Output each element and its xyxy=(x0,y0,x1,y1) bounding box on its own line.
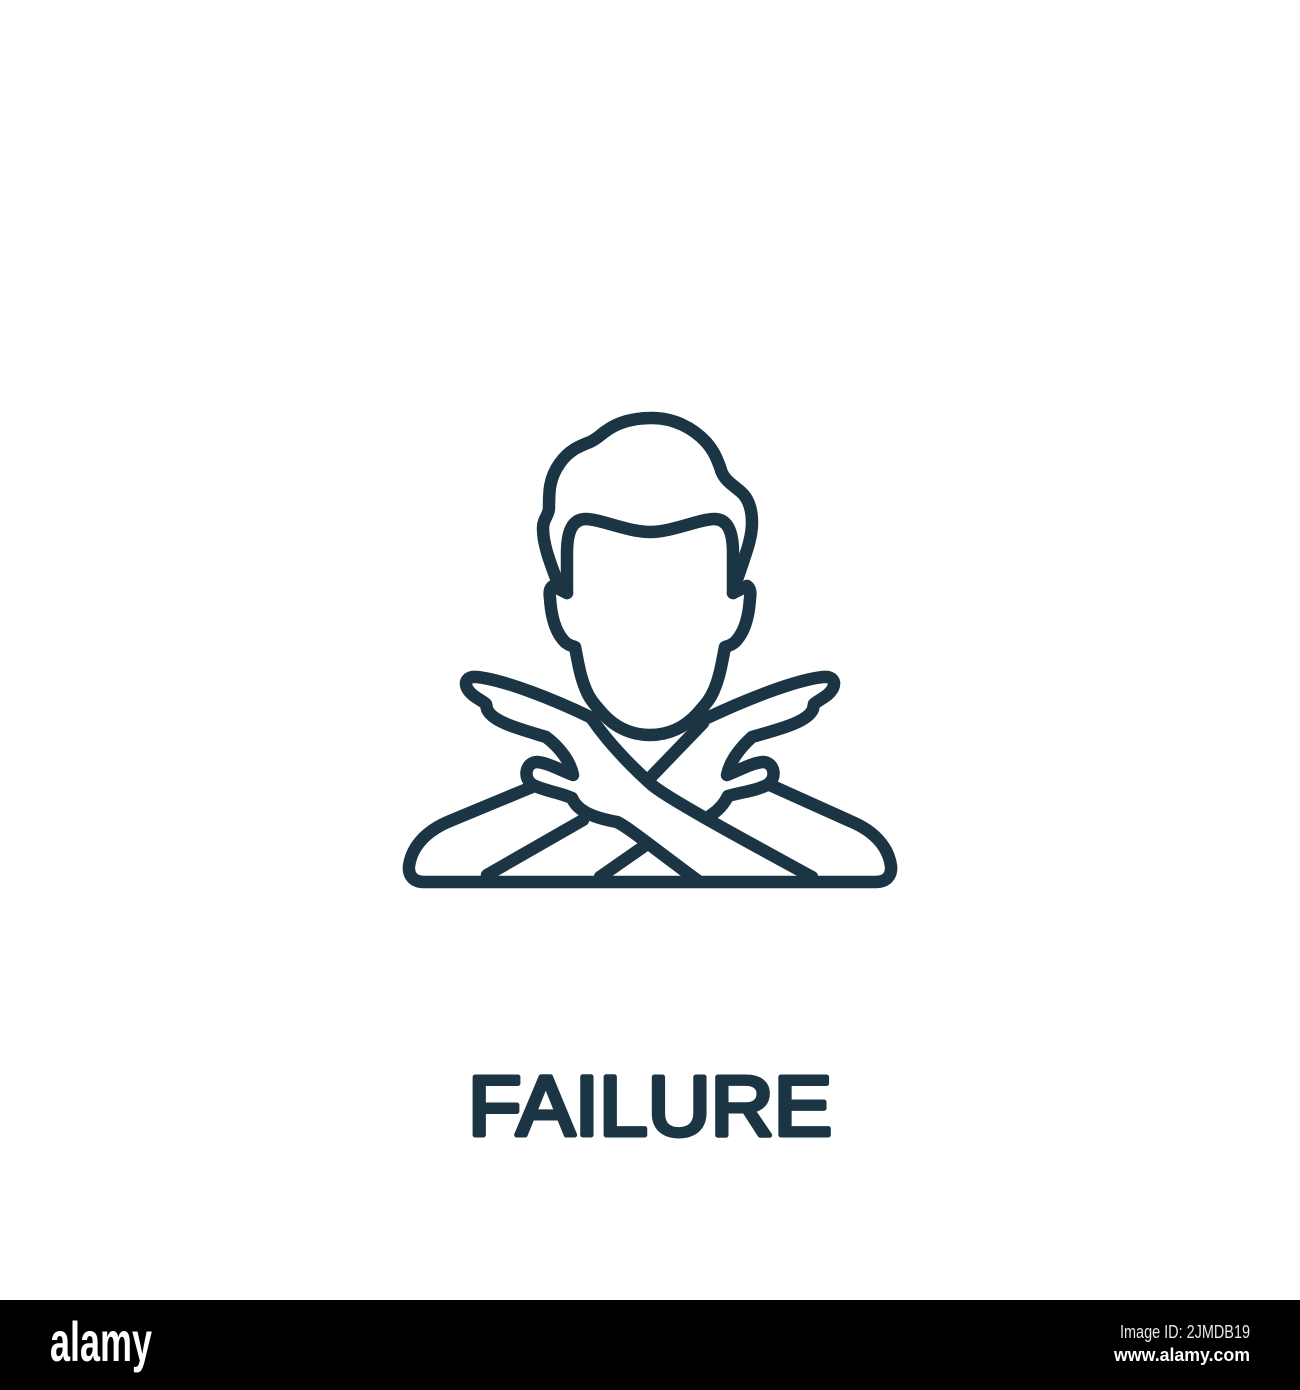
right hand xyxy=(707,677,834,815)
hairline and forehead xyxy=(567,519,733,593)
footer website: www.alamy.com xyxy=(1113,1345,1250,1365)
inner arm edge xyxy=(650,723,703,778)
footer logo: alamy: alamy xyxy=(50,1310,152,1373)
lower centre edge xyxy=(600,847,643,877)
lower left arm edge xyxy=(487,820,583,875)
footer image id: Image ID: 2JMDB19 xyxy=(1120,1322,1250,1342)
title: FAILURE: FAILURE xyxy=(468,1059,832,1153)
hair outline xyxy=(543,418,752,581)
left hand and forearm xyxy=(466,677,697,880)
icon: man with crossed arms xyxy=(409,418,891,882)
face, ears and chin xyxy=(550,586,750,735)
forearm crossing to the right xyxy=(592,719,812,877)
footer bar xyxy=(0,1300,1300,1390)
shoulders and base xyxy=(409,785,891,882)
